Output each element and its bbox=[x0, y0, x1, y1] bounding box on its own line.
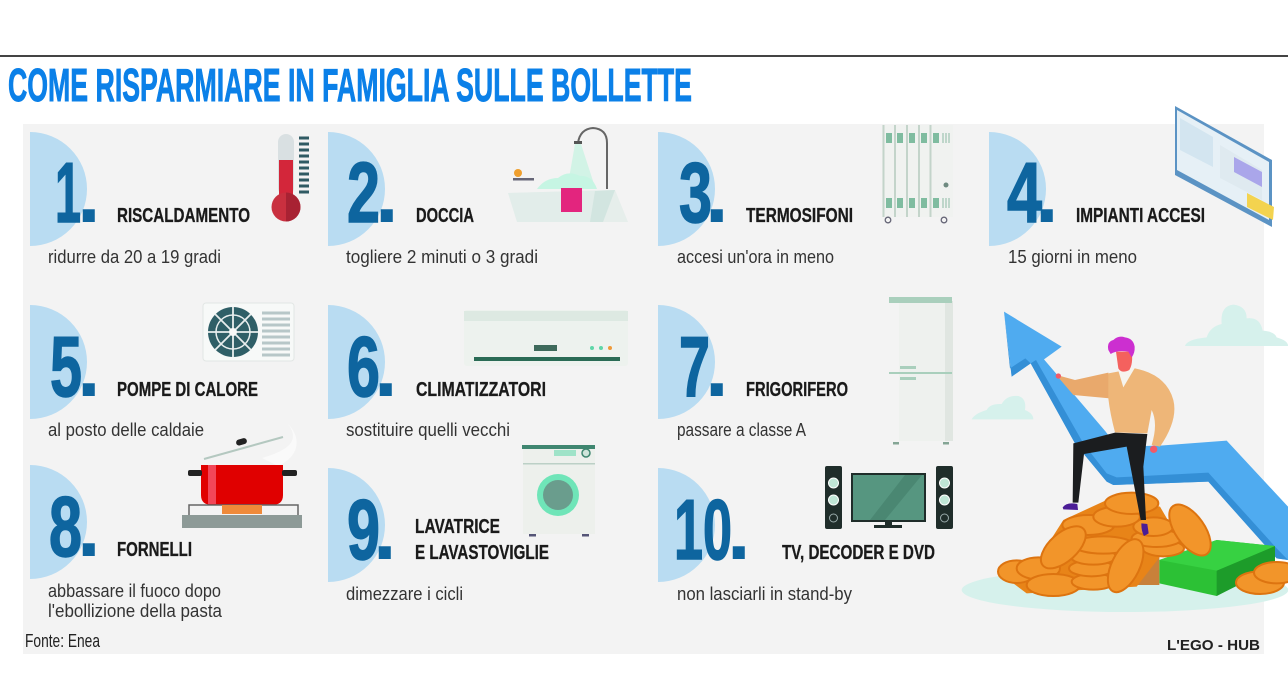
item 6: climatizzatori: 6 bbox=[347, 320, 380, 415]
item 3: termosifoni bbox=[658, 132, 853, 267]
item 7: frigorifero: 7 bbox=[679, 320, 710, 415]
title: COME RISPARMIARE IN FAMIGLIA SULLE BOLLETTE bbox=[8, 59, 692, 111]
item 8: fornelli: . bbox=[77, 480, 101, 575]
item 9: lavatrice e lavastoviglie bbox=[328, 468, 549, 604]
item 1: riscaldamento: . bbox=[77, 146, 101, 241]
legs bbox=[1073, 433, 1147, 520]
item 10: tv, decoder e dvd: 10 bbox=[674, 483, 732, 578]
icon: air conditioner bbox=[464, 310, 628, 366]
item 1: riscaldamento bbox=[30, 132, 250, 267]
hands bbox=[1056, 373, 1061, 379]
item 5: pompe di calore bbox=[30, 305, 258, 440]
item 2: doccia: DOCCIA bbox=[416, 205, 474, 227]
item 7: frigorifero: FRIGORIFERO bbox=[746, 379, 848, 401]
item 6: climatizzatori bbox=[328, 305, 546, 440]
item 1: riscaldamento: RISCALDAMENTO bbox=[117, 205, 250, 227]
item 10: tv, decoder e dvd: TV, DECODER E DVD bbox=[782, 542, 935, 564]
item 5: pompe di calore: 5 bbox=[50, 320, 82, 415]
item 4: impianti accesi bbox=[989, 132, 1205, 267]
icon: refrigerator bbox=[889, 297, 953, 444]
item 7: frigorifero: passare a classe A bbox=[677, 420, 806, 440]
item 2: doccia: togliere 2 minuti o 3 gradi bbox=[346, 247, 538, 267]
item 5: pompe di calore: . bbox=[77, 320, 101, 415]
item 9: lavatrice e lavastoviglie: LAVATRICE bbox=[415, 516, 500, 538]
coin pile bbox=[998, 493, 1288, 598]
credit: L'EGO - HUB bbox=[1167, 637, 1260, 654]
item 3: termosifoni: accesi un'ora in meno bbox=[677, 247, 834, 267]
item 9: lavatrice e lavastoviglie: E LAVASTOVIGLIE bbox=[415, 542, 549, 564]
item 10: tv, decoder e dvd: non lasciarli in stand-by bbox=[677, 584, 852, 604]
hair bbox=[1108, 337, 1135, 357]
item 5: pompe di calore: al posto delle caldaie bbox=[48, 420, 204, 440]
item 5: pompe di calore: POMPE DI CALORE bbox=[117, 379, 258, 401]
icon: control panel bbox=[1175, 106, 1274, 227]
item 2: doccia: . bbox=[375, 146, 399, 241]
icon: bathtub bbox=[508, 128, 628, 222]
item 4: impianti accesi: IMPIANTI ACCESI bbox=[1076, 205, 1205, 227]
item 6: climatizzatori: sostituire quelli vecchi bbox=[346, 420, 510, 440]
ground shadow bbox=[962, 568, 1288, 612]
money stack bbox=[1137, 540, 1275, 596]
illustration: man on rising arrow with coins bbox=[962, 305, 1288, 612]
item 8: fornelli: l'ebollizione della pasta bbox=[48, 601, 223, 621]
rising arrow bbox=[1004, 312, 1288, 560]
item 3: termosifoni: . bbox=[705, 146, 729, 241]
icon: outdoor heat pump unit bbox=[203, 303, 294, 361]
trailing arm bbox=[1057, 373, 1110, 398]
sweater bbox=[1108, 368, 1174, 447]
cloud right bbox=[1185, 305, 1288, 346]
source note: Fonte: Enea bbox=[25, 631, 101, 651]
item 8: fornelli: abbassare il fuoco dopo bbox=[48, 581, 221, 601]
item 4: impianti accesi: 4 bbox=[1007, 146, 1042, 241]
item 9: lavatrice e lavastoviglie: dimezzare i cicli bbox=[346, 584, 463, 604]
face bbox=[1116, 352, 1132, 372]
item 6: climatizzatori: . bbox=[374, 320, 398, 415]
item 10: tv, decoder e dvd: . bbox=[727, 483, 751, 578]
item 2: doccia bbox=[328, 132, 538, 267]
item 8: fornelli bbox=[30, 465, 223, 621]
item 6: climatizzatori: CLIMATIZZATORI bbox=[416, 379, 546, 401]
item 1: riscaldamento: ridurre da 20 a 19 gradi bbox=[48, 247, 221, 267]
item 7: frigorifero: . bbox=[705, 320, 729, 415]
item 8: fornelli: FORNELLI bbox=[117, 539, 192, 561]
panel: background bbox=[23, 124, 1264, 654]
shirt collar bbox=[1118, 368, 1135, 387]
item 4: impianti accesi: 15 giorni in meno bbox=[1008, 247, 1137, 267]
man bbox=[1056, 337, 1174, 536]
item 8: fornelli: 8 bbox=[49, 480, 82, 575]
shoes bbox=[1063, 503, 1078, 510]
icon: thermometer bbox=[272, 134, 309, 222]
item 7: frigorifero bbox=[658, 305, 848, 440]
item 4: impianti accesi: . bbox=[1035, 146, 1059, 241]
item 3: termosifoni: 3 bbox=[679, 146, 712, 241]
icon: radiator bbox=[882, 125, 953, 223]
icon: tv and speakers bbox=[825, 466, 953, 529]
icon: pot on stove bbox=[182, 424, 302, 528]
item 2: doccia: 2 bbox=[347, 146, 380, 241]
icon: washing machine bbox=[522, 445, 595, 536]
cloud left bbox=[972, 396, 1033, 419]
item 10: tv, decoder e dvd bbox=[658, 468, 935, 604]
item 3: termosifoni: TERMOSIFONI bbox=[746, 205, 853, 227]
item 1: riscaldamento: 1 bbox=[55, 146, 81, 241]
item 9: lavatrice e lavastoviglie: 9 bbox=[347, 483, 380, 578]
item 9: lavatrice e lavastoviglie: . bbox=[373, 483, 397, 578]
